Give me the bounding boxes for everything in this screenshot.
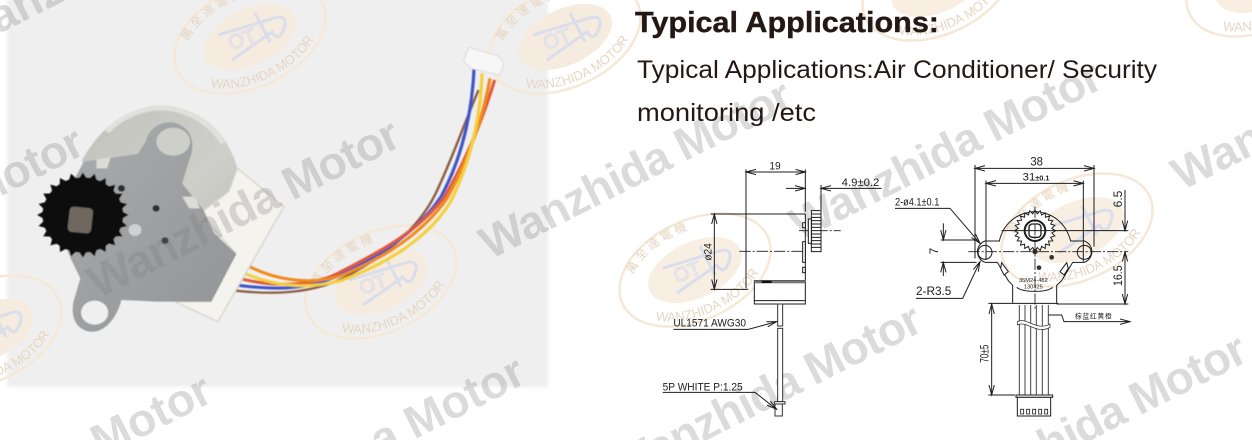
wire connector outline [1016, 395, 1053, 416]
motor body [739, 214, 841, 304]
center lines [968, 207, 1128, 310]
dimension: 38 [975, 155, 1094, 258]
watermark text lines: Wanzhida Motor [781, 49, 1110, 250]
watermark seal: drawing left: WANZHIDA MOTOR [656, 269, 758, 322]
wire bundle [1017, 305, 1050, 395]
body text [637, 56, 1158, 127]
dimension: 70: 70±5 [978, 344, 992, 363]
model marking: 35M24-482 [1019, 278, 1048, 284]
side view drawing [663, 160, 882, 416]
watermark text lines: Wanzhida Motor [471, 68, 800, 269]
watermark seal: top middle: OT [541, 25, 574, 55]
model marking: 130425 [1024, 284, 1043, 290]
watermark seal: top left: OT [226, 25, 259, 55]
dimension: diameter 24: ø24 [702, 243, 714, 261]
mounting holes [156, 128, 190, 156]
watermark seal: drawing left: OT [671, 258, 704, 288]
dimension: 7 [927, 223, 977, 276]
watermark seal: top middle [488, 0, 642, 95]
dimension: 7: 7 [927, 247, 941, 254]
watermark seal: drawing right: 萬至達電機 [1007, 182, 1069, 234]
dimension: 6.5 and 16.5: 16.5 [1111, 265, 1125, 286]
dimension: 19 [746, 160, 805, 288]
watermark seal: top left [173, 0, 327, 95]
watermark seal: drawing left: 萬至達電機 [625, 222, 687, 274]
can rim highlight [107, 108, 223, 143]
label: mounting hole: 2-ø4.1±0.1 [895, 197, 939, 209]
dimension: 31 [986, 172, 1083, 262]
watermark seal: lower middle: WANZHIDA MOTOR [342, 281, 444, 334]
plate rivets and tabs [152, 205, 160, 212]
motor outline [977, 212, 1092, 303]
dimension: 70 [978, 303, 1015, 395]
dimension: 4.9 [786, 177, 882, 210]
gear front view [1015, 210, 1055, 251]
wire connector [464, 47, 504, 75]
label: corner radius [916, 262, 980, 298]
watermark seal: top centre right [861, 0, 1000, 42]
label: wire spec: UL1571 AWG30 [673, 318, 746, 330]
label: connector spec [663, 382, 777, 409]
label: wire colours: 棕蓝红黄橙 [1075, 311, 1112, 320]
dimension: 6.5 and 16.5 [1002, 190, 1128, 304]
mounting plate [54, 122, 236, 332]
label: corner radius: 2-R3.5 [916, 284, 952, 298]
watermark seal: lower middle [304, 224, 458, 340]
watermark seal: top left: WANZHIDA MOTOR [212, 36, 314, 88]
gear [37, 172, 129, 258]
model marking [1019, 278, 1048, 290]
white terminal block [175, 168, 284, 322]
wire and connector [774, 304, 785, 416]
watermark seal: left edge [0, 274, 63, 382]
front view drawing [895, 155, 1130, 416]
watermark seal: top right [1185, 0, 1252, 38]
watermark seal: drawing left [618, 212, 772, 328]
watermark seal: drawing right [1000, 172, 1154, 288]
motor photo [37, 47, 504, 332]
body text: Typical Applications:Air Conditioner/ Security [637, 56, 1158, 84]
dimension: 6.5 and 16.5: 6.5 [1111, 190, 1125, 207]
dimension: 19: 19 [769, 160, 781, 172]
panel: product photo background [7, 0, 548, 387]
watermark text lines: Wanzhida Motor [79, 107, 408, 308]
dimension: 4.9: 4.9±0.2 [842, 177, 879, 189]
shaft [67, 206, 93, 234]
rivets [1032, 249, 1054, 270]
dimension: 38: 38 [1030, 155, 1043, 169]
watermark seal: top middle: WANZHIDA MOTOR [526, 36, 628, 88]
heading: Typical Applications: [635, 7, 939, 39]
watermark seal: drawing right: WANZHIDA MOTOR [1038, 229, 1140, 282]
motor can [82, 106, 238, 267]
label: connector spec: 5P WHITE P:1.25 [663, 382, 743, 394]
label: wire colours [1048, 311, 1130, 322]
dimension: 31: 31±0.1 [1023, 172, 1049, 184]
watermark seal: lower middle: 萬至達電機 [312, 234, 373, 280]
gear side view [803, 211, 821, 273]
wires [236, 65, 495, 293]
dimension: diameter 24 [702, 214, 805, 289]
label: mounting hole [895, 197, 980, 243]
watermark seal: lower middle: OT [357, 270, 390, 300]
body text: monitoring /etc [637, 99, 816, 127]
